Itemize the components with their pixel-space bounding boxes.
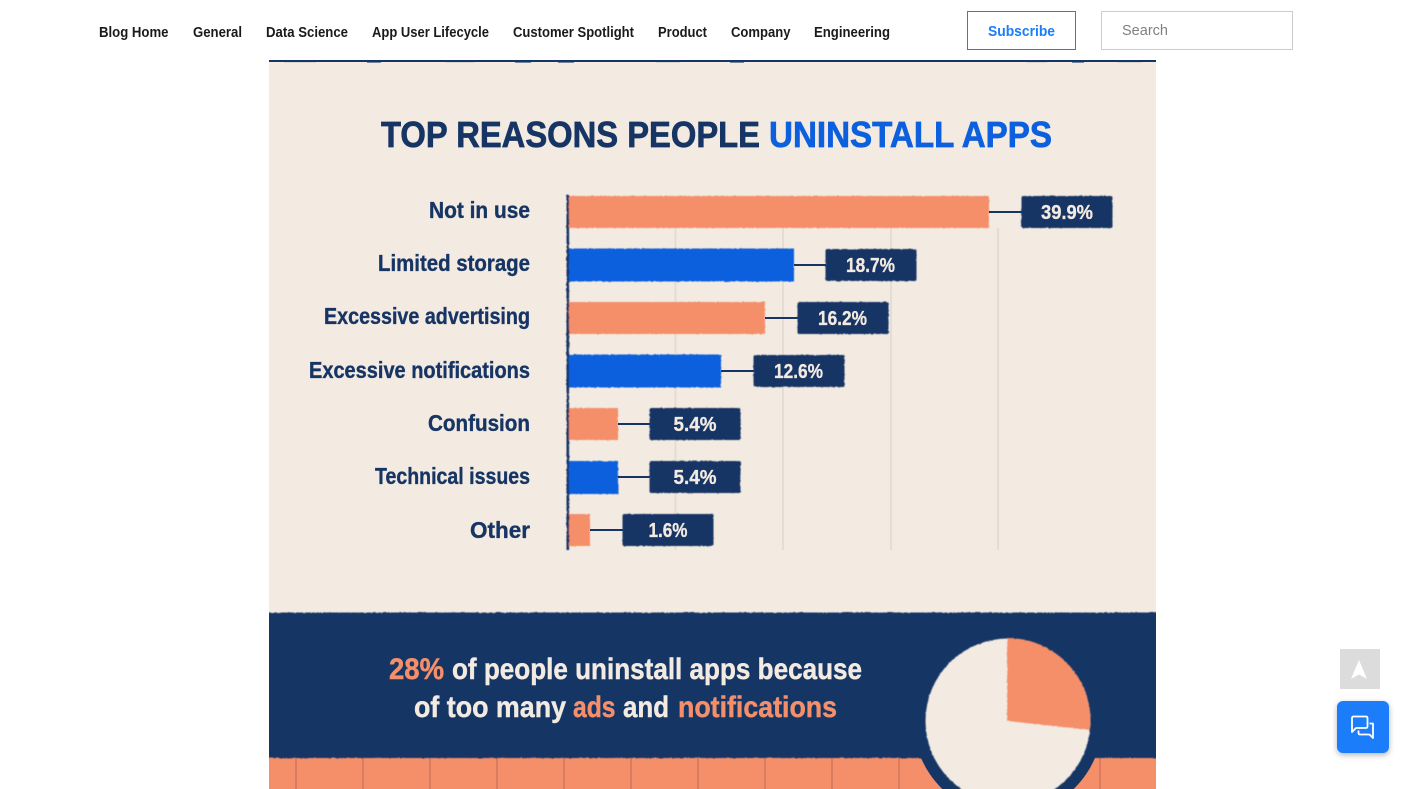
category labels: Confusion (428, 410, 530, 436)
chat button (1337, 701, 1389, 753)
navigation bar (99, 25, 890, 41)
back to top button (1340, 649, 1380, 689)
category labels: Technical issues (375, 463, 530, 489)
navigation bar: Company (731, 25, 790, 41)
callout text: ads (573, 691, 616, 724)
navigation bar: Product (658, 25, 707, 41)
navigation bar: Engineering (814, 25, 890, 41)
callout text (389, 653, 862, 724)
callout text: and (623, 691, 669, 724)
subscribe button (968, 12, 1076, 50)
icon: chat bubbles (1352, 716, 1373, 738)
search box: Search (1122, 23, 1168, 39)
category labels: Limited storage (378, 250, 530, 276)
panel: 28% callout (264, 612, 1161, 789)
panel: uninstall reasons (255, 60, 1389, 789)
value labels: 18.7% (846, 255, 895, 277)
title (381, 114, 1052, 155)
category labels: Other (470, 517, 530, 543)
category labels: Excessive advertising (324, 303, 530, 329)
value labels: 5.4% (674, 467, 717, 489)
value labels: 12.6% (774, 361, 823, 383)
title: TOP REASONS PEOPLE (381, 114, 760, 155)
value labels (622, 196, 1112, 546)
navigation bar: General (193, 25, 242, 41)
navigation bar: Blog Home (99, 25, 168, 41)
pie chart (914, 626, 1102, 789)
subscribe button: Subscribe (988, 24, 1055, 40)
category labels: Not in use (429, 197, 530, 223)
value labels: 5.4% (674, 414, 717, 436)
callout text: 28% (389, 653, 444, 686)
value labels: 39.9% (1041, 202, 1093, 224)
bar chart (566, 195, 1112, 550)
category labels (309, 197, 530, 543)
callout text: of too many (414, 691, 566, 724)
search box (1102, 12, 1292, 50)
callout text: notifications (678, 691, 837, 724)
navigation bar: App User Lifecycle (372, 25, 489, 41)
callout text: of people uninstall apps because (452, 653, 862, 686)
title: UNINSTALL APPS (769, 114, 1052, 155)
value labels: 16.2% (818, 308, 867, 330)
value labels: 1.6% (648, 520, 688, 542)
navigation bar: Data Science (266, 25, 348, 41)
panel: plank strip (269, 750, 1156, 789)
navigation bar: Customer Spotlight (513, 25, 634, 41)
category labels: Excessive notifications (309, 357, 530, 383)
